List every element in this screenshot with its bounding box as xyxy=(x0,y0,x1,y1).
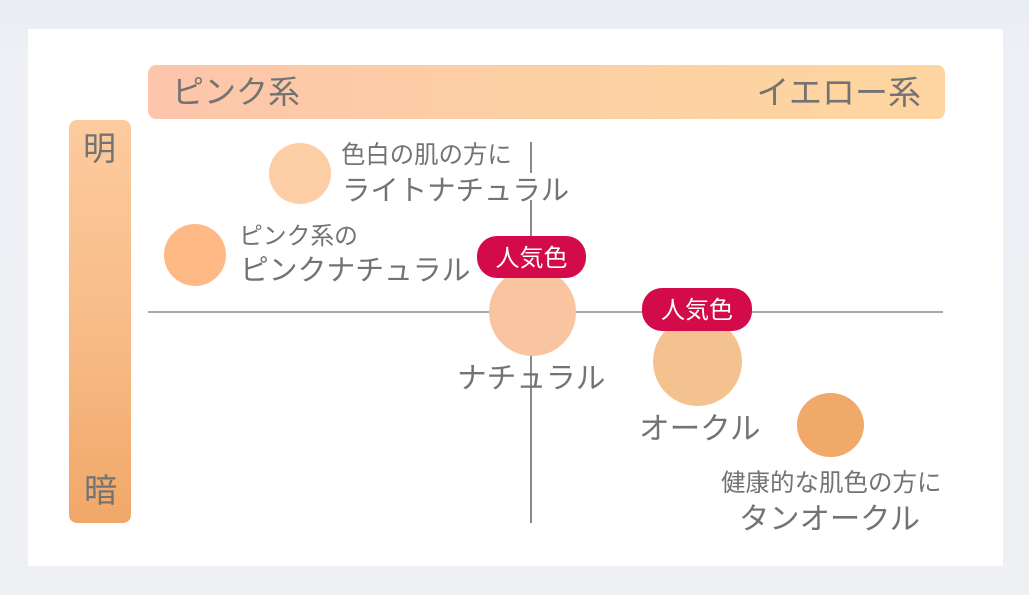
heading bar: pink to yellow scale xyxy=(148,65,945,119)
name: tan ochre: タンオークル xyxy=(739,503,920,536)
caption: pink family: ピンク系の xyxy=(239,223,358,250)
caption: for healthy skin: 健康的な肌色の方に xyxy=(721,470,942,497)
name: light natural: ライトナチュラル xyxy=(342,175,569,207)
name: pink natural: ピンクナチュラル xyxy=(240,255,470,287)
caption: for fair skin: 色白の肌の方に xyxy=(341,142,512,169)
label: ochre: オークル xyxy=(639,412,760,446)
badge: popular colour, natural xyxy=(477,236,586,278)
label: yellow family: イエロー系 xyxy=(756,74,921,111)
vertical axis xyxy=(530,142,532,523)
horizontal axis xyxy=(148,311,943,313)
badge: popular colour, natural: 人気色 xyxy=(496,245,568,272)
label: light: 明 xyxy=(83,130,116,167)
swatch: tan ochre xyxy=(797,393,864,457)
swatch: natural xyxy=(489,268,576,356)
badge: popular colour, ochre xyxy=(642,288,752,331)
badge: popular colour, ochre: 人気色 xyxy=(661,297,733,324)
swatch: pink natural xyxy=(164,224,226,286)
label: light natural xyxy=(341,142,569,207)
label: pink natural xyxy=(239,223,470,287)
label: pink family: ピンク系 xyxy=(172,74,300,110)
swatch: ochre xyxy=(653,317,742,406)
side bar: light to dark scale xyxy=(69,120,131,523)
mask behind name xyxy=(522,173,542,200)
label: dark: 暗 xyxy=(84,472,117,509)
label: natural: ナチュラル xyxy=(457,362,605,395)
swatch: light natural xyxy=(269,143,331,204)
label: tan ochre xyxy=(721,470,942,536)
